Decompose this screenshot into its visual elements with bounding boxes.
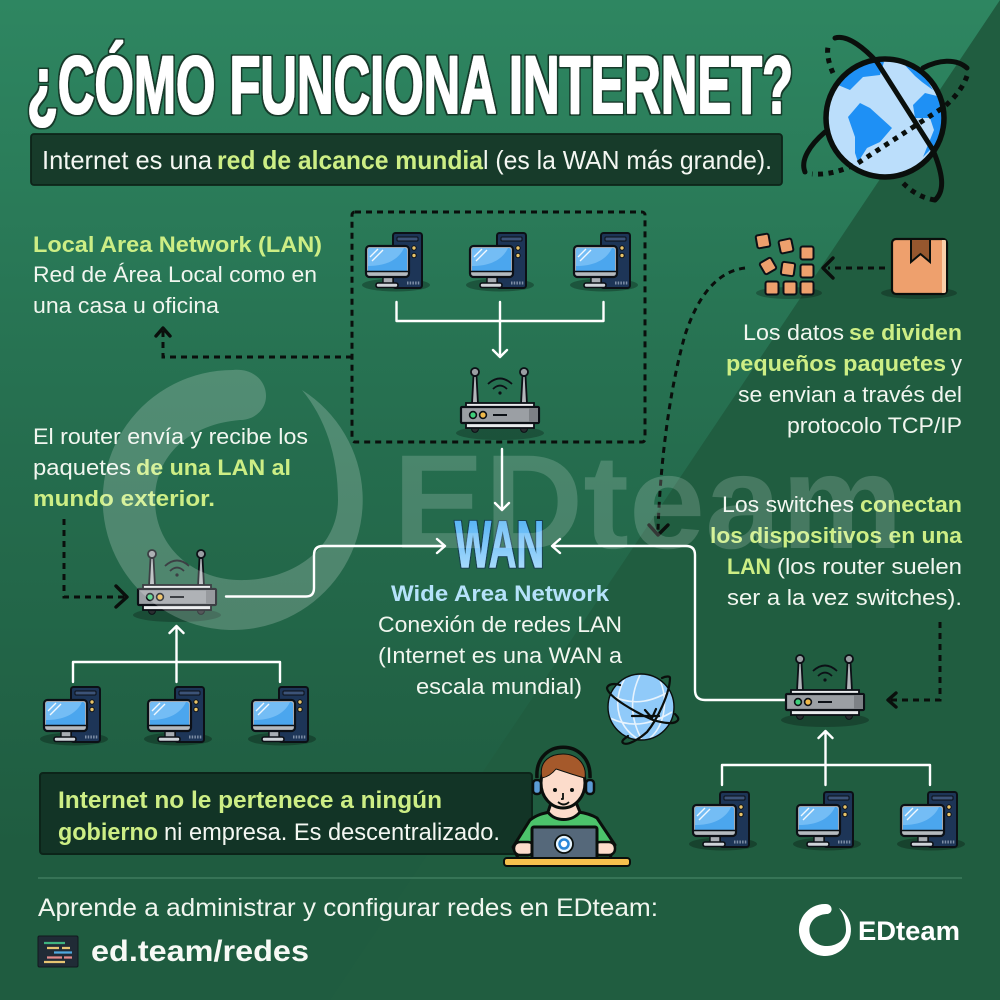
text: switches: ser a la vez switches).: [727, 585, 962, 610]
dashed arrow: packets to WAN: [649, 268, 745, 535]
text: packets: y: [951, 351, 962, 376]
text: switches: conectan: [860, 492, 962, 517]
text: WAN definition: (Internet es una WAN a: [378, 643, 623, 668]
LAN computers: [362, 233, 638, 292]
left router: [133, 550, 221, 622]
callout: decentralized: Internet no le pertenece a ningún: [58, 787, 442, 814]
footer text: Aprende a administrar y configurar redes en EDteam:: [38, 894, 658, 922]
LAN router: [456, 368, 544, 440]
text: packets: pequeños paquetes: [726, 351, 946, 376]
dashed arrow: LAN to label: [156, 328, 352, 357]
right router: [781, 655, 869, 727]
arrow: right computers to router: [722, 731, 930, 785]
text: router: paquetes: [33, 455, 131, 480]
text: packets: protocolo TCP/IP: [787, 413, 962, 438]
subtitle banner: l (es la WAN más grande).: [483, 145, 772, 175]
watermark: EDteam logo: [103, 370, 903, 630]
text: LAN definition: Local Area Network (LAN): [33, 232, 322, 257]
text: packets: se dividen: [849, 320, 962, 345]
arrow: right router to WAN: [552, 539, 785, 700]
text: LAN definition: una casa u oficina: [33, 293, 220, 318]
callout: decentralized: ni empresa. Es descentralizado.: [164, 819, 500, 846]
text: router: de una LAN al: [136, 455, 291, 480]
icon: person with laptop: [504, 747, 630, 866]
text: router: El router envía y recibe los: [33, 424, 308, 449]
dashed arrow: text to right router: [888, 622, 940, 707]
arrow: left router to WAN: [226, 539, 445, 596]
subtitle banner: red de alcance mundia: [217, 145, 484, 175]
watermark: EDteam logo: EDteam: [393, 428, 903, 577]
text: switches: LAN: [727, 554, 771, 579]
footer divider: [38, 877, 962, 879]
footer link: ed.team/redes: [91, 935, 309, 968]
text: router: mundo exterior.: [33, 486, 215, 511]
icon: code window: [38, 936, 78, 967]
arrow: computers to router: [396, 302, 604, 357]
text: WAN definition: escala mundial): [416, 674, 582, 699]
left computers: [40, 687, 316, 746]
right computers: [689, 792, 965, 850]
text: packets: se envian a través del: [738, 382, 962, 407]
text: LAN definition: Red de Área Local como en: [33, 262, 317, 287]
LAN dashed box: [352, 212, 645, 442]
text: switches: (los router suelen: [777, 554, 962, 579]
subtitle banner: Internet es una: [42, 145, 213, 175]
arrow: LAN to WAN: [495, 449, 509, 510]
callout: decentralized: [40, 773, 532, 854]
icon: small globe: [607, 674, 678, 744]
text: WAN definition: Conexión de redes LAN: [378, 612, 622, 637]
text: packets: Los datos: [743, 320, 844, 345]
EDteam logo: [799, 904, 960, 956]
arrow: left computers to router: [73, 626, 280, 682]
text: switches: los dispositivos en una: [710, 523, 963, 548]
callout: decentralized: gobierno: [58, 819, 158, 846]
dashed arrow: package to packets: [823, 258, 885, 278]
background diagonal: [330, 0, 1000, 1000]
text: switches: Los switches: [722, 492, 854, 517]
EDteam logo: EDteam: [858, 916, 960, 946]
subtitle banner: [31, 134, 782, 185]
text: WAN definition: Wide Area Network: [391, 581, 610, 606]
dashed arrow: text to left router: [64, 519, 127, 607]
icon: packets: [755, 233, 822, 299]
icon: globe with orbits: [804, 37, 967, 200]
WAN heading: WAN: [455, 507, 544, 581]
icon: package box: [881, 239, 957, 299]
